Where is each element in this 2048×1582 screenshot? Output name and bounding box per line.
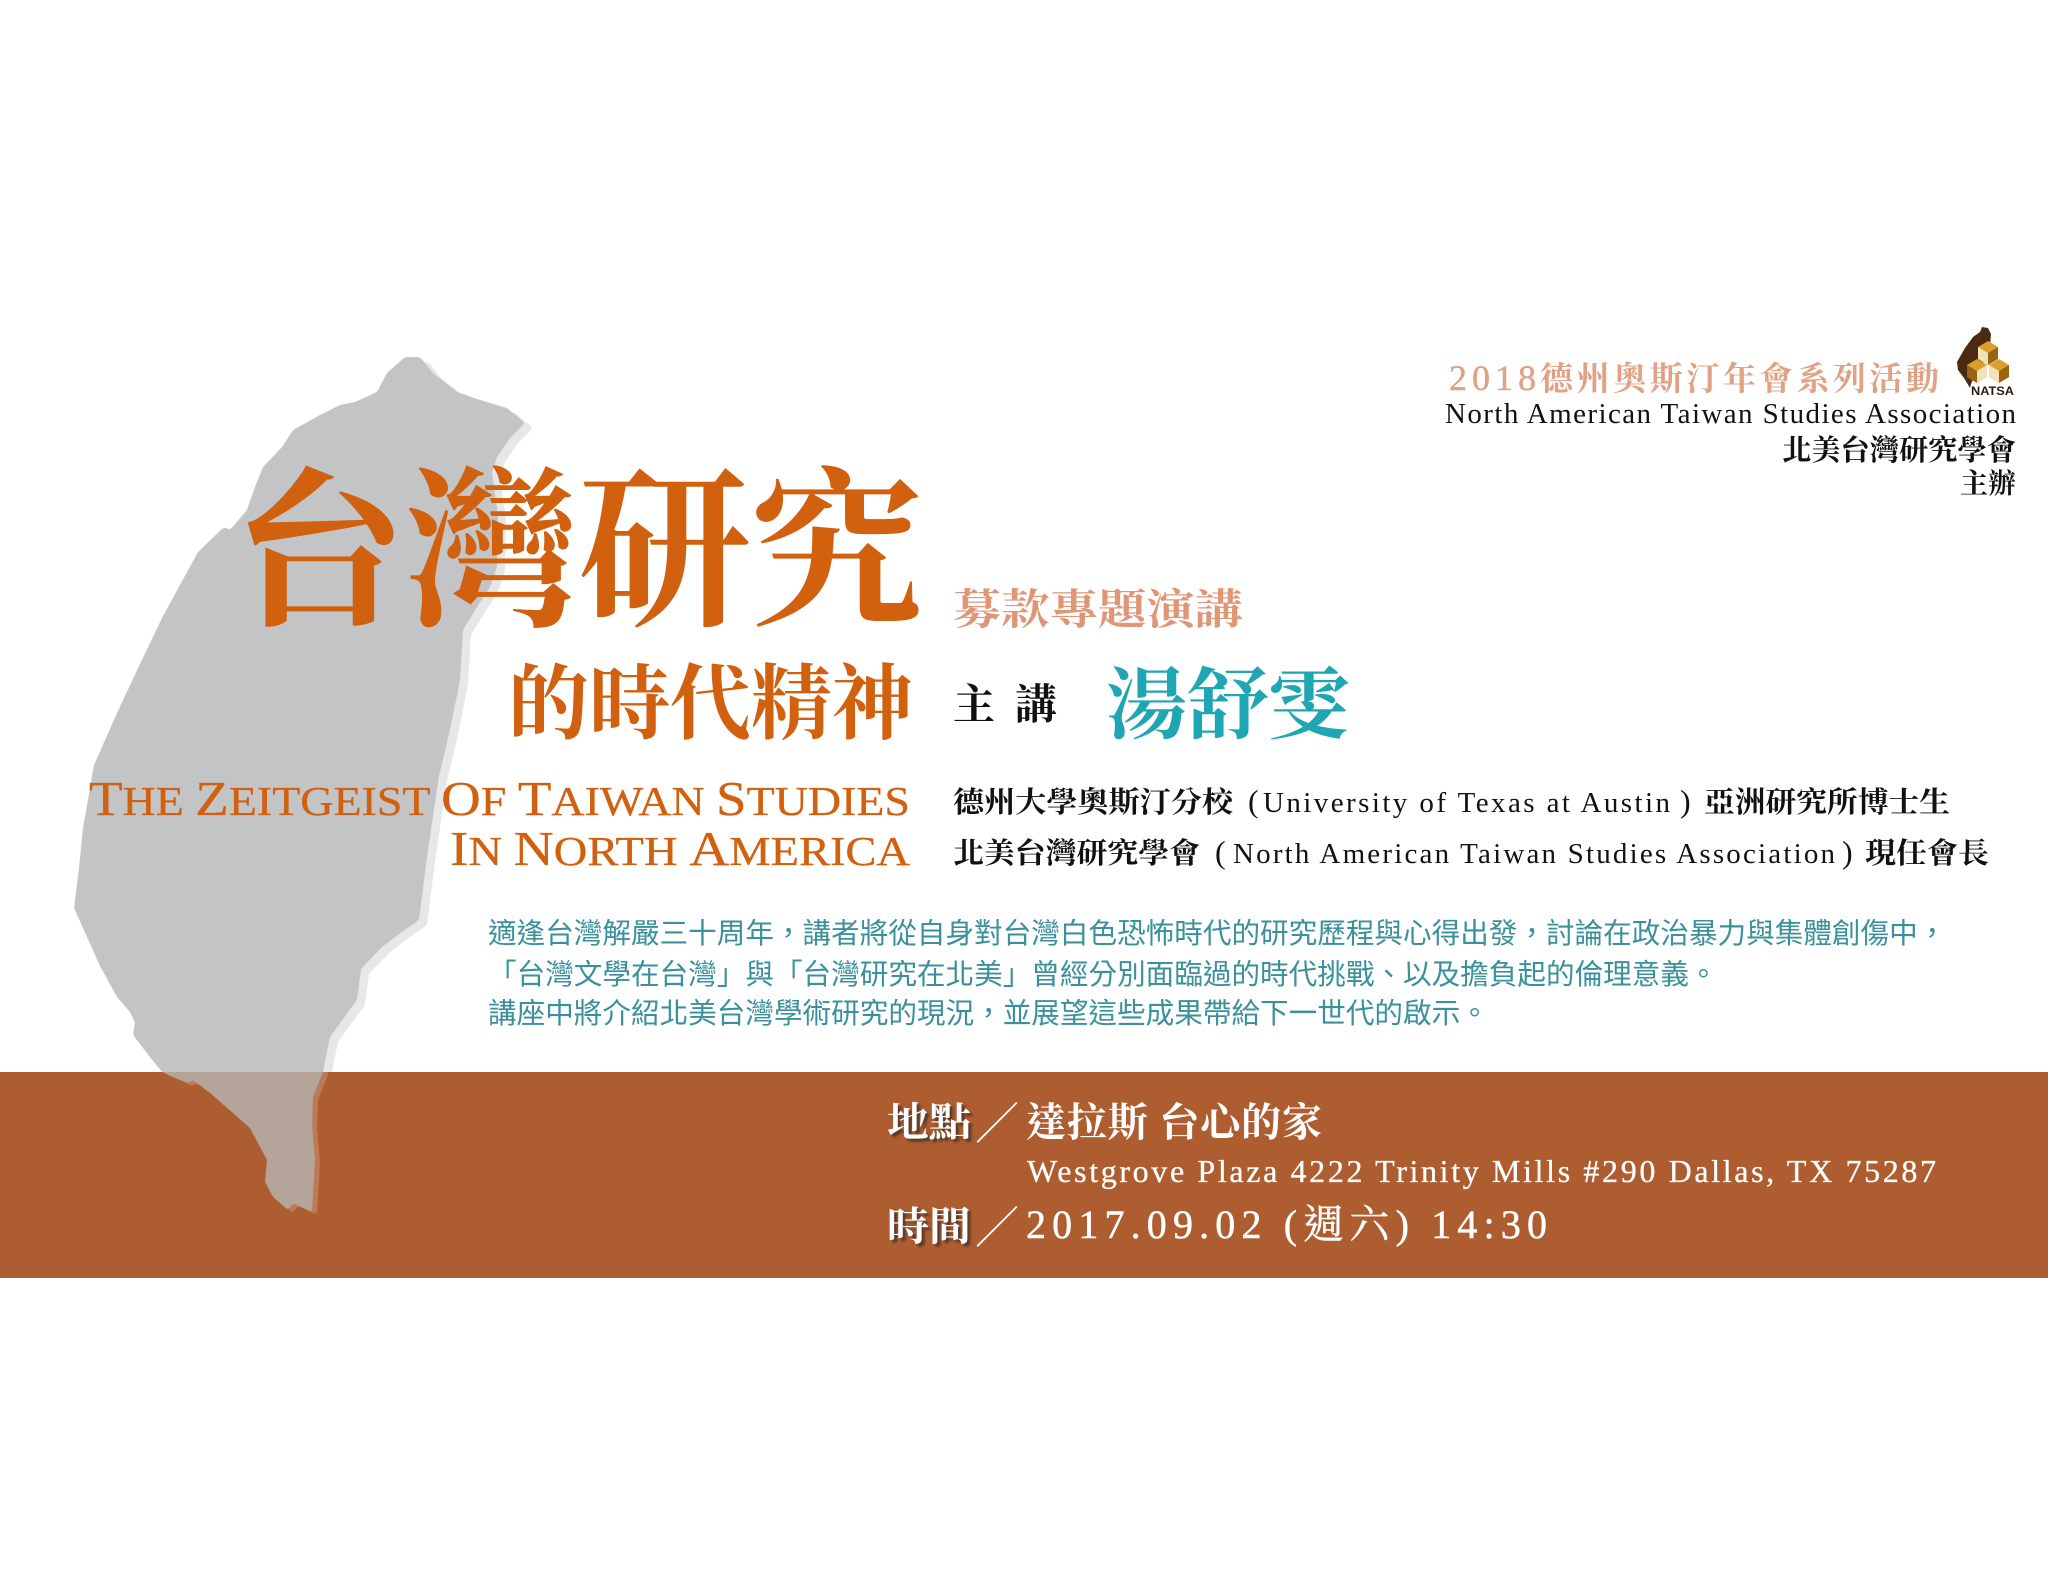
description line two: 「台灣文學在台灣」與「台灣研究在北美」曾經分別面臨過的時代挑戰、以及擔負起的倫理意義。 <box>488 959 1718 991</box>
logo wordmark: NATSA <box>1971 386 2014 398</box>
title line two: 的時代精神 <box>508 659 913 750</box>
venue label: 地點 <box>887 1100 971 1145</box>
bio line two: 現任會長 <box>1865 837 1989 870</box>
speaker name: 湯舒雯 <box>1106 662 1350 749</box>
event venue <box>887 1100 1936 1189</box>
bio line one: University of Texas at Austin <box>1263 787 1670 819</box>
English title <box>89 771 910 876</box>
bio line one: 德州大學奧斯汀分校 <box>953 786 1235 819</box>
event info band <box>0 1072 2048 1278</box>
date and time: 2017.09.02 (週六) 14:30 <box>1026 1202 1547 1247</box>
bio line two <box>953 834 1989 870</box>
series label: 德州奧斯汀年會系列活動 <box>1540 361 1939 398</box>
bio line one: ) <box>1680 783 1691 819</box>
venue divider slash: ／ <box>975 1100 1019 1149</box>
series label: 2018 <box>1449 358 1536 398</box>
association Chinese name: 北美台灣研究學會 <box>1782 434 2016 467</box>
organizer label: 主辦 <box>1960 468 2016 500</box>
speaker bio <box>953 783 1989 870</box>
event time <box>887 1202 1547 1253</box>
description line one: 適逢台灣解嚴三十周年，講者將從自身對台灣白色恐怖時代的研究歷程與心得出發，討論在政治暴力與集體創傷中， <box>488 918 1946 950</box>
fundraising lecture heading: 募款專題演講 <box>953 587 1243 634</box>
title line one: 台灣研究 <box>233 460 923 650</box>
bio line two: ( <box>1215 834 1226 870</box>
lecture description <box>488 918 1946 1030</box>
time label: 時間 <box>887 1204 971 1249</box>
speaker label: 主 講 <box>953 682 1057 729</box>
description line three: 講座中將介紹北美台灣學術研究的現況，並展望這些成果帶給下一世代的啟示。 <box>488 998 1489 1030</box>
main title <box>233 460 923 750</box>
association English name: North American Taiwan Studies Association <box>1445 398 2016 430</box>
English line one: THE ZEITGEIST OF TAIWAN STUDIES <box>89 771 910 826</box>
bio line one <box>953 783 1950 819</box>
time divider slash: ／ <box>975 1204 1019 1253</box>
Taiwan map silhouette <box>74 357 533 1217</box>
venue address: Westgrove Plaza 4222 Trinity Mills #290 Dallas, TX 75287 <box>1027 1153 1936 1189</box>
English line two: IN NORTH AMERICA <box>450 821 910 876</box>
venue name: 達拉斯 台心的家 <box>1026 1100 1322 1145</box>
bio line two: ) <box>1842 834 1853 870</box>
bio line two: North American Taiwan Studies Association <box>1233 838 1836 870</box>
bio line one: ( <box>1248 783 1259 819</box>
organizer block <box>1445 327 2016 500</box>
bio line two: 北美台灣研究學會 <box>953 837 1200 870</box>
bio line one: 亞洲研究所博士生 <box>1704 786 1950 819</box>
icon: NATSA logo <box>1957 327 2014 398</box>
